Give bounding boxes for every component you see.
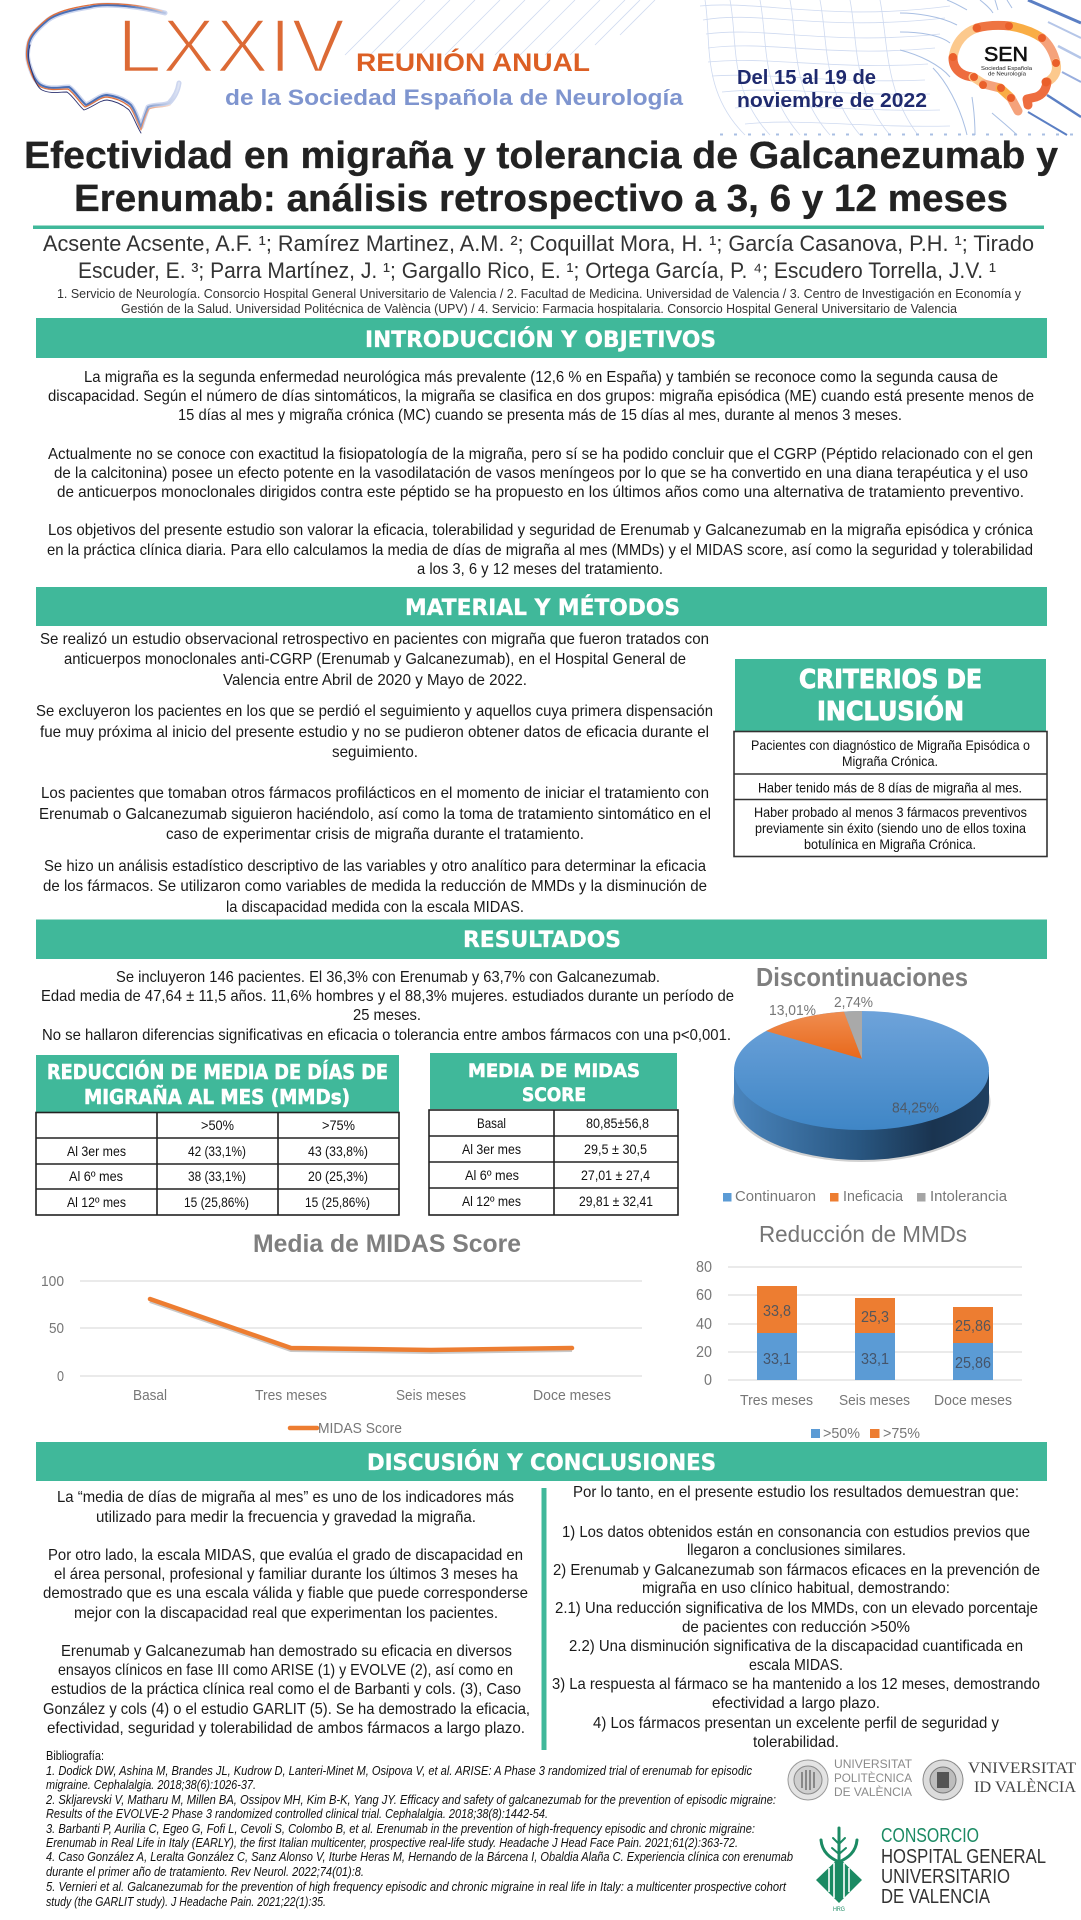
text block: introducción: Actualmente no se conoce con exactitud la fisiopatología de la migraña, pero sí se ha podido concluir que el CGRP (Péptido relacionado con el gen xyxy=(48,446,1033,463)
table: reducción de media de días de migraña al mes: MIGRAÑA AL MES (MMDs) xyxy=(84,1085,350,1109)
authors: Acsente Acsente, A.F. ¹; Ramírez Martinez, A.M. ²; Coquillat Mora, H. ¹; García Casanova, P.H. ¹; Tirado xyxy=(43,231,1034,256)
text block: introducción: La migraña es la segunda enfermedad neurológica más prevalente (12,6 % en España) y también se reconoce como la segunda causa de xyxy=(84,369,998,386)
logo: Universitat de València: ID VALÈNCIA xyxy=(974,1777,1076,1796)
text block: resultados: 25 meses. xyxy=(353,1007,421,1024)
table: reducción de media de días de migraña al mes: 38 (33,1%) xyxy=(188,1168,246,1184)
logo: SEN: SEN xyxy=(984,44,1028,66)
chart: reducción de MMDs stacked bars: 25,86 xyxy=(955,1318,991,1335)
chart: discontinuaciones pie: 2,74% xyxy=(834,994,873,1011)
table: reducción de media de días de migraña al mes: >75% xyxy=(322,1117,355,1133)
heading: introducción: INTRODUCCIÓN Y OBJETIVOS xyxy=(365,327,716,353)
title: Erenumab: análisis retrospectivo a 3, 6 y 12 meses xyxy=(74,178,1008,220)
text block: introducción: de la calcitonina) posee un efecto potente en la vasodilatación de vasos meníngeos por lo que se ha convertido en una diana terapéutica y el uso xyxy=(54,465,1028,482)
table: media de MIDAS score: 80,85±56,8 xyxy=(586,1115,649,1131)
chart: reducción de MMDs stacked bars: 60 xyxy=(696,1287,712,1304)
chart: reducción de MMDs stacked bars: Tres meses xyxy=(740,1392,813,1409)
text block: métodos: Se hizo un análisis estadístico descriptivo de las variables y otro analítico para determinar la eficacia xyxy=(44,858,706,875)
text block: métodos: Los pacientes que tomaban otros fármacos profilácticos en el momento de iniciar el tratamiento con xyxy=(41,785,709,802)
panel: resultados xyxy=(36,920,1047,1442)
text block: introducción: de anticuerpos monoclonales dirigidos contra este péptido se ha propuesto en los últimos años como una alternativa de tratamiento preventivo. xyxy=(57,484,1024,501)
logo: Universitat de València: VNIVERSITAT xyxy=(968,1760,1076,1777)
dates: noviembre de 2022 xyxy=(737,90,927,112)
text block: conclusiones: escala MIDAS. xyxy=(749,1657,843,1674)
text block: resultados: Se incluyeron 146 pacientes. El 36,3% con Erenumab y 63,7% con Galcanezumab. xyxy=(116,969,660,986)
logo: Universitat Politècnica de València xyxy=(788,1759,912,1800)
affiliations: 1. Servicio de Neurología. Consorcio Hospital General Universitario de Valencia / 2. Facultad de Medicina. Universidad de Valencia / 3. Centro de Investigación en Economía y xyxy=(57,287,1022,301)
authors: Escuder, E. ³; Parra Martínez, J. ¹; Gargallo Rico, E. ¹; Ortega García, P. ⁴; Escudero Torrella, J.V. ¹ xyxy=(78,258,996,283)
logo: SEN xyxy=(949,22,1060,111)
bibliography: Bibliografía: xyxy=(46,1749,104,1763)
chart: reducción de MMDs stacked bars: >50% xyxy=(823,1425,860,1442)
chart: reducción de MMDs stacked bars: 0 xyxy=(704,1372,712,1389)
dates xyxy=(737,67,927,112)
table: media de MIDAS score: Al 12º mes xyxy=(462,1193,521,1209)
text block: conclusiones: llegaron a conclusiones similares. xyxy=(687,1542,906,1559)
text block: conclusiones: de pacientes con reducción >50% xyxy=(682,1619,910,1636)
chart: discontinuaciones pie: 13,01% xyxy=(769,1002,816,1019)
panel: criterios de inclusión: botulínica en Migraña Crónica. xyxy=(804,836,976,852)
logo: Universitat Politècnica de València: UNIVERSITAT xyxy=(834,1759,912,1771)
table: reducción de media de días de migraña al mes: 15 (25,86%) xyxy=(305,1194,370,1210)
table: media de MIDAS score: Al 3er mes xyxy=(462,1141,521,1157)
bibliography: 2. Skljarevski V, Matharu M, Millen BA, Ossipov MH, Kim B-K, Yang JY. Efficacy and safety of galcanezumab for the prevention of episodic migraine: xyxy=(45,1793,776,1807)
text block: discusión: estudios de la práctica clínica real como el de Barbanti y cols. (3), Caso xyxy=(51,1681,521,1698)
table: reducción de media de días de migraña al mes: 15 (25,86%) xyxy=(184,1194,249,1210)
affiliations: Gestión de la Salud. Universidad Politécnica de València (UPV) / 4. Servicio: Farmacia hospitalaria. Consorcio Hospital General Universitario de Valencia xyxy=(121,302,957,316)
chart: reducción de MMDs stacked bars: 33,1 xyxy=(763,1351,791,1368)
chart: media de MIDAS score line: 50 xyxy=(49,1320,64,1337)
panel: criterios de inclusión: Haber probado al menos 3 fármacos preventivos xyxy=(754,804,1027,820)
logo: Universitat Politècnica de València: POLITÈCNICA xyxy=(834,1772,912,1785)
table: reducción de media de días de migraña al mes: 42 (33,1%) xyxy=(188,1143,246,1159)
logo: Consorcio Hospital General Universitario de Valencia: HOSPITAL GENERAL xyxy=(881,1846,1046,1868)
logo: Universitat de València xyxy=(923,1760,1076,1800)
text block: conclusiones: 3) La respuesta al fármaco se ha mantenido a los 12 meses, demostrando xyxy=(552,1676,1040,1693)
bibliography: Results of the EVOLVE-2 Phase 3 randomized controlled clinical trial. Cephalalgia. 2018;38(8):1442-54. xyxy=(46,1807,548,1821)
text block: discusión: Por otro lado, la escala MIDAS, que evalúa el grado de discapacidad en xyxy=(48,1547,523,1564)
text block: métodos: caso de experimentar crisis de migraña durante el tratamiento. xyxy=(166,826,584,843)
chart: media de MIDAS score line: MIDAS Score xyxy=(318,1420,402,1437)
heading: resultados: RESULTADOS xyxy=(463,928,621,953)
bibliography: 3. Barbanti P, Aurilia C, Egeo G, Fofi L, Cevoli S, Colombo B, et al. Erenumab in the prevention of high-frequency episodic and chronic migraine: xyxy=(46,1822,755,1836)
text block: métodos: Se excluyeron los pacientes en los que se perdió el seguimiento y aquellos cuya primera dispensación xyxy=(36,703,713,720)
text block: resultados: No se hallaron diferencias significativas en eficacia o tolerancia entre ambos fármacos con una p<0,001. xyxy=(42,1027,731,1044)
text block: métodos: Valencia entre Abril de 2020 y Mayo de 2022. xyxy=(223,672,527,689)
text block: métodos: Se realizó un estudio observacional retrospectivo en pacientes con migraña que fueron tratados con xyxy=(40,631,709,648)
dates: Del 15 al 19 de xyxy=(737,67,876,89)
text block: métodos xyxy=(36,631,713,916)
text block: métodos: Erenumab o Galcanezumab siguieron haciéndolo, así como la toma de tratamiento sintomático en el xyxy=(39,806,711,823)
text block: métodos: anticuerpos monoclonales anti-CGRP (Erenumab y Galcanezumab), en el Hospital General de xyxy=(64,651,686,668)
logo: Consorcio Hospital General Universitario de Valencia: HRG xyxy=(833,1907,845,1913)
text block: conclusiones: 4) Los fármacos presentan un excelente perfil de seguridad y xyxy=(593,1715,999,1732)
event numeral LXXIV: LXXIV xyxy=(117,4,345,89)
logo: SEN: Sociedad Española xyxy=(981,66,1032,72)
text block: resultados: Edad media de 47,64 ± 11,5 años. 11,6% hombres y el 88,3% mujeres. estudiados durante un período de xyxy=(41,988,734,1005)
heading: discusión y conclusiones xyxy=(36,1442,1047,1481)
chart: media de MIDAS score line: Media de MIDAS Score xyxy=(253,1230,521,1258)
chart: media de MIDAS score line: Tres meses xyxy=(255,1387,327,1404)
text block: conclusiones: efectividad a largo plazo. xyxy=(712,1695,880,1712)
chart: discontinuaciones pie: Discontinuaciones xyxy=(756,962,968,992)
text block: conclusiones: 2.2) Una disminución significativa de la discapacidad cuantificada en xyxy=(569,1638,1023,1655)
text block: introducción: a los 3, 6 y 12 meses del tratamiento. xyxy=(417,561,663,578)
chart: reducción de MMDs stacked bars: 33,8 xyxy=(763,1303,791,1320)
logo: Consorcio Hospital General Universitario de Valencia: UNIVERSITARIO xyxy=(881,1866,1010,1888)
table: reducción de media de días de migraña al mes: Al 6º mes xyxy=(69,1168,123,1184)
chart: reducción de MMDs stacked bars: Reducción de MMDs xyxy=(759,1221,967,1247)
chart: reducción de MMDs stacked bars: Seis meses xyxy=(839,1392,910,1409)
bibliography: durante el primer año de tratamiento. Rev Neurol. 2022;74(01):8. xyxy=(46,1865,364,1879)
heading: discusión y conclusiones: DISCUSIÓN Y CONCLUSIONES xyxy=(367,1450,716,1476)
chart: reducción de MMDs stacked bars: 20 xyxy=(696,1344,712,1361)
table: reducción de media de días de migraña al mes xyxy=(36,1055,399,1215)
bibliography: 1. Dodick DW, Ashina M, Brandes JL, Kudrow D, Lanteri-Minet M, Osipova V, et al. ARISE: A Phase 3 randomized trial of erenumab for episodic xyxy=(46,1764,753,1778)
text block: discusión: demostrado que es una escala válida y fiable que puede corresponderse xyxy=(43,1585,528,1602)
panel: criterios de inclusión: Pacientes con diagnóstico de Migraña Episódica o xyxy=(751,737,1030,753)
text block: métodos: fue muy próxima al inicio del presente estudio y no se pudieron obtener datos de eficacia durante el xyxy=(40,724,709,741)
panel: criterios de inclusión: previamente sin éxito (siendo uno de ellos toxina xyxy=(755,820,1026,836)
text block: discusión: efectividad, seguridad y tolerabilidad de ambos fármacos a largo plazo. xyxy=(47,1720,525,1737)
bibliography: study (the GARLIT study). J Headache Pain. 2021;22(1):35. xyxy=(46,1895,326,1909)
text block: discusión: Erenumab y Galcanezumab han demostrado su eficacia en diversos xyxy=(61,1643,512,1660)
chart: discontinuaciones pie: 84,25% xyxy=(892,1100,939,1116)
chart: discontinuaciones pie: Intolerancia xyxy=(930,1188,1008,1205)
heading: material y métodos: MATERIAL Y MÉTODOS xyxy=(405,595,680,621)
text block: discusión: utilizado para medir la frecuencia y gravedad la migraña. xyxy=(96,1509,476,1526)
text block: conclusiones xyxy=(552,1484,1040,1751)
chart: reducción de MMDs stacked bars: Doce meses xyxy=(934,1392,1012,1409)
heading: resultados xyxy=(36,920,1047,959)
panel: criterios de inclusión xyxy=(734,659,1047,856)
chart: discontinuaciones pie: Ineficacia xyxy=(843,1188,904,1205)
text block: discusión: ensayos clínicos en fase III como ARISE (1) y EVOLVE (2), así como en xyxy=(58,1662,513,1679)
text block: métodos: seguimiento. xyxy=(332,744,418,761)
chart: reducción de MMDs stacked bars: 25,3 xyxy=(861,1309,889,1326)
text block: introducción: discapacidad. Según el número de días sintomáticos, la migraña se clasifica en dos grupos: migraña episódica (ME) cuando está presente menos de xyxy=(48,388,1034,405)
chart: reducción de MMDs stacked bars: 40 xyxy=(696,1316,712,1333)
text block: discusión: La “media de días de migraña al mes” es uno de los indicadores más xyxy=(57,1489,514,1506)
meeting name: REUNIÓN ANUAL xyxy=(356,47,590,77)
panel: material y métodos xyxy=(36,587,1047,916)
logo: Consorcio Hospital General Universitario de Valencia: CONSORCIO xyxy=(881,1825,979,1847)
chart: reducción de MMDs stacked bars xyxy=(696,1221,1022,1442)
table: media de MIDAS score: MEDIA DE MIDAS xyxy=(468,1060,640,1082)
chart: media de MIDAS score line: Basal xyxy=(133,1387,167,1404)
text block: métodos: de los fármacos. Se utilizaron como variables de medida la reducción de MMDs y la disminución de xyxy=(43,878,707,895)
chart: media de MIDAS score line: 100 xyxy=(41,1273,64,1290)
table: reducción de media de días de migraña al mes: Al 3er mes xyxy=(67,1143,126,1159)
text block: conclusiones: migraña en uso clínico habitual, demostrando: xyxy=(642,1580,950,1597)
text block: discusión: mejor con la discapacidad real que experimentan los pacientes. xyxy=(74,1605,498,1622)
panel: discusión y conclusiones xyxy=(36,1442,1047,1751)
table: media de MIDAS score: 29,5 ± 30,5 xyxy=(584,1141,647,1157)
text block: conclusiones: 2.1) Una reducción significativa de los MMDs, con un elevado porcentaje xyxy=(555,1600,1038,1617)
table: media de MIDAS score xyxy=(429,1053,678,1215)
header banner xyxy=(27,0,1081,135)
chart: reducción de MMDs stacked bars: 25,86 xyxy=(955,1355,991,1372)
table: media de MIDAS score: Basal xyxy=(477,1115,506,1131)
text block: métodos: la discapacidad medida con la escala MIDAS. xyxy=(226,899,524,916)
text block: conclusiones: tolerabilidad. xyxy=(753,1734,839,1751)
logo: Universitat Politècnica de València: DE VALÈNCIA xyxy=(834,1786,912,1799)
table: media de MIDAS score: 29,81 ± 32,41 xyxy=(579,1193,653,1209)
chart: media de MIDAS score line: Seis meses xyxy=(396,1387,466,1404)
text block: introducción: Los objetivos del presente estudio son valorar la eficacia, tolerabilidad y seguridad de Erenumab y Galcanezumab en la migraña episódica y crónica xyxy=(48,522,1033,539)
authors xyxy=(43,231,1034,283)
table: reducción de media de días de migraña al mes: 20 (25,3%) xyxy=(308,1168,368,1184)
text block: conclusiones: 2) Erenumab y Galcanezumab son fármacos eficaces en la prevención de xyxy=(553,1562,1040,1579)
panel: criterios de inclusión: INCLUSIÓN xyxy=(817,695,964,727)
logo: Consorcio Hospital General Universitario de Valencia: DE VALENCIA xyxy=(881,1886,991,1908)
table: media de MIDAS score: SCORE xyxy=(522,1084,586,1106)
heading: material y métodos xyxy=(36,587,1047,626)
text block: conclusiones: 1) Los datos obtenidos están en consonancia con estudios previos que xyxy=(562,1524,1030,1541)
table: media de MIDAS score: 27,01 ± 27,4 xyxy=(581,1167,650,1183)
text block: resultados xyxy=(41,969,734,1044)
chart: reducción de MMDs stacked bars: >75% xyxy=(883,1425,920,1442)
title: Efectividad en migraña y tolerancia de Galcanezumab y xyxy=(24,135,1058,177)
logo: SEN: de Neurología xyxy=(988,72,1026,78)
text block: introducción xyxy=(47,369,1034,578)
logo: Consorcio Hospital General Universitario de Valencia xyxy=(816,1825,1046,1913)
table: reducción de media de días de migraña al mes: REDUCCIÓN DE MEDIA DE DÍAS DE xyxy=(47,1060,388,1084)
bibliography: 4. Caso González A, Leralta González C, Sanz Alonso V, Iturbe Heras M, Hernando de la Bárcena I, Obaldia Alaña C. Experiencia clínica con erenumab xyxy=(46,1850,793,1864)
chart: media de MIDAS score line: 0 xyxy=(57,1368,64,1385)
chart: discontinuaciones pie xyxy=(723,962,1008,1205)
bibliography: migraine. Cephalalgia. 2018;38(6):1026-37. xyxy=(46,1778,256,1792)
text block: discusión xyxy=(43,1489,530,1737)
bibliography xyxy=(45,1749,793,1909)
text block: conclusiones: Por lo tanto, en el presente estudio los resultados demuestran que: xyxy=(573,1484,1019,1501)
table: reducción de media de días de migraña al mes: Al 12º mes xyxy=(67,1194,126,1210)
text block: introducción: 15 días al mes y migraña crónica (MC) cuando se presenta más de 15 días al mes, durante al menos 3 meses. xyxy=(178,407,902,424)
affiliations xyxy=(57,287,1022,316)
icon: brain outline xyxy=(27,4,179,133)
panel: criterios de inclusión: Migraña Crónica. xyxy=(842,753,938,769)
title xyxy=(24,135,1058,220)
bibliography: Erenumab in Real Life in Italy (EARLY), the first Italian multicenter, prospective real-life study. Headache J Head Face Pain. 2021;61(2):363-72. xyxy=(46,1836,738,1850)
table: reducción de media de días de migraña al mes: 43 (33,8%) xyxy=(308,1143,368,1159)
society name: de la Sociedad Española de Neurología xyxy=(225,85,684,110)
chart: reducción de MMDs stacked bars: 80 xyxy=(696,1259,712,1276)
bibliography: 5. Vernieri et al. Galcanezumab for the prevention of high frequency episodic and chronic migraine in real life in Italy: a multicenter prospective cohort xyxy=(46,1880,786,1894)
panel: introducción y objetivos xyxy=(36,318,1047,578)
table: reducción de media de días de migraña al mes: >50% xyxy=(201,1117,234,1133)
text block: introducción: en la práctica clínica diaria. Para ello calculamos la media de días de migraña al mes (MMDs) y el MIDAS score, así como la seguridad y tolerabilidad xyxy=(47,542,1033,559)
chart: media de MIDAS score line: Doce meses xyxy=(533,1387,611,1404)
chart: reducción de MMDs stacked bars: 33,1 xyxy=(861,1351,889,1368)
text block: discusión: González y cols (4) o el estudio GARLIT (5). Se ha demostrado la eficacia, xyxy=(43,1701,530,1718)
panel: criterios de inclusión: Haber tenido más de 8 días de migraña al mes. xyxy=(758,780,1022,796)
heading: introducción xyxy=(36,318,1047,358)
chart: media de MIDAS score line xyxy=(41,1230,642,1437)
panel: criterios de inclusión: CRITERIOS DE xyxy=(799,665,982,695)
chart: discontinuaciones pie: Continuaron xyxy=(735,1188,816,1205)
text block: discusión: el área personal, profesional y familiar durante los últimos 3 meses ha xyxy=(54,1566,518,1583)
table: media de MIDAS score: Al 6º mes xyxy=(465,1167,519,1183)
